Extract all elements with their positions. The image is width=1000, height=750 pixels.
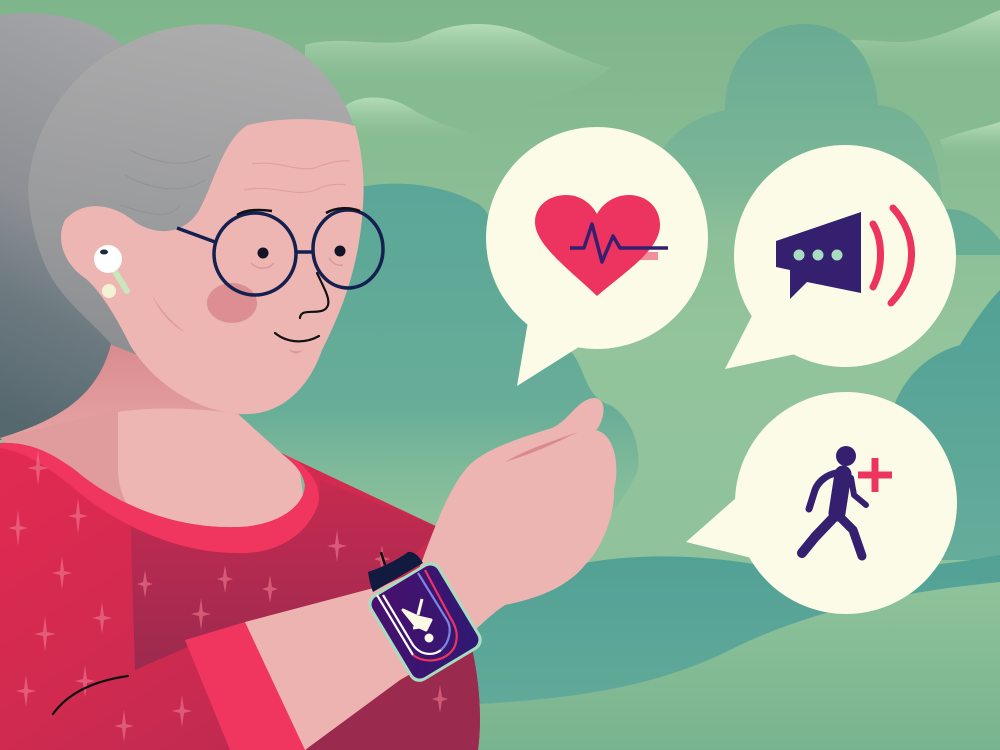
woman: hair bun xyxy=(0,13,175,440)
sparkles on shirt xyxy=(8,450,448,742)
chin shadow xyxy=(289,349,303,354)
icon: walking person with plus xyxy=(802,446,892,556)
wrinkles xyxy=(244,161,350,193)
watch strap top xyxy=(381,552,385,565)
hair strands xyxy=(120,150,210,214)
speech bubble: fall walker xyxy=(686,392,957,614)
right lower bush xyxy=(885,290,1000,560)
woman: face xyxy=(61,119,364,414)
nose xyxy=(300,273,328,318)
earbud xyxy=(94,245,127,291)
right edge bush xyxy=(905,209,1000,255)
hand xyxy=(415,398,616,645)
eyes and brows xyxy=(237,208,360,268)
collar xyxy=(0,443,319,553)
woman: chest skin xyxy=(118,408,310,560)
mouth xyxy=(275,333,319,341)
woman: neck shadow xyxy=(0,340,250,438)
arm crease xyxy=(53,676,128,714)
centre teal bush xyxy=(200,184,638,560)
watch bands xyxy=(377,570,457,660)
woman: shoulder skin xyxy=(0,410,140,540)
woman: hair front xyxy=(28,24,355,360)
watch screen xyxy=(368,562,482,682)
glasses xyxy=(177,210,383,295)
jaw crease xyxy=(151,293,186,333)
lower torso xyxy=(305,640,480,750)
teal valley xyxy=(450,555,1000,750)
speech bubble: heart xyxy=(486,127,708,386)
icon: megaphone with sound waves xyxy=(776,208,912,303)
front hill xyxy=(460,582,1000,750)
sleeve cuff xyxy=(185,622,307,750)
fall icon xyxy=(403,599,434,642)
icon: heart with pulse xyxy=(535,195,668,296)
forearm xyxy=(245,560,470,750)
earring xyxy=(102,284,116,298)
speech bubble: speaker xyxy=(725,145,956,369)
hand crease xyxy=(505,432,578,462)
watch body xyxy=(364,558,486,686)
shirt xyxy=(0,443,480,750)
far hills xyxy=(305,10,1000,180)
sleeve dark area xyxy=(130,480,440,670)
blush xyxy=(207,283,257,323)
upper right bush xyxy=(640,24,945,260)
smartwatch xyxy=(364,552,486,686)
